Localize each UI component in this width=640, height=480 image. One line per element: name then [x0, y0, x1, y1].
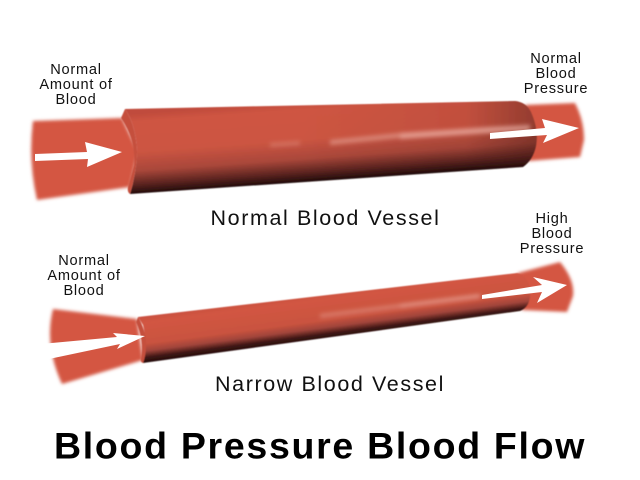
blood flow entering narrow vessel — [50, 309, 143, 384]
label: high blood pressure: Blood — [531, 226, 573, 242]
arrow: high pressure outflow — [482, 277, 567, 303]
arrow: normal inflow — [35, 142, 122, 167]
title: Blood Pressure Blood Flow — [54, 424, 586, 466]
blood flow entering normal vessel — [31, 118, 138, 200]
label: normal amount of blood (bottom): Normal — [58, 253, 110, 269]
blood flow leaving narrow vessel — [518, 262, 573, 312]
label: high blood pressure: Pressure — [520, 241, 584, 257]
normal vessel tube — [121, 101, 537, 194]
narrow vessel tube — [136, 273, 530, 363]
arrow: normal outflow — [490, 119, 579, 143]
label: normal amount of blood (top): Amount of — [39, 77, 113, 93]
narrow vessel highlight — [320, 294, 480, 318]
label: normal blood pressure: Pressure — [524, 81, 588, 97]
label: normal amount of blood (top): Blood — [55, 92, 97, 108]
label: high blood pressure: High — [535, 211, 569, 227]
label: normal amount of blood (top): Normal — [50, 62, 102, 78]
vessel highlight — [270, 125, 530, 147]
label: normal amount of blood (bottom): Amount of — [47, 268, 121, 284]
heading: narrow blood vessel: Narrow Blood Vessel — [215, 372, 445, 396]
narrow blood vessel diagram — [30, 262, 573, 384]
heading: normal blood vessel: Normal Blood Vessel — [211, 206, 440, 230]
arrow: narrow inflow — [30, 333, 145, 363]
blood flow leaving normal vessel — [525, 103, 584, 161]
label: normal blood pressure: Blood — [535, 66, 577, 82]
label: normal blood pressure: Normal — [530, 51, 582, 67]
label: normal amount of blood (bottom): Blood — [63, 283, 105, 299]
normal blood vessel diagram — [31, 101, 584, 200]
